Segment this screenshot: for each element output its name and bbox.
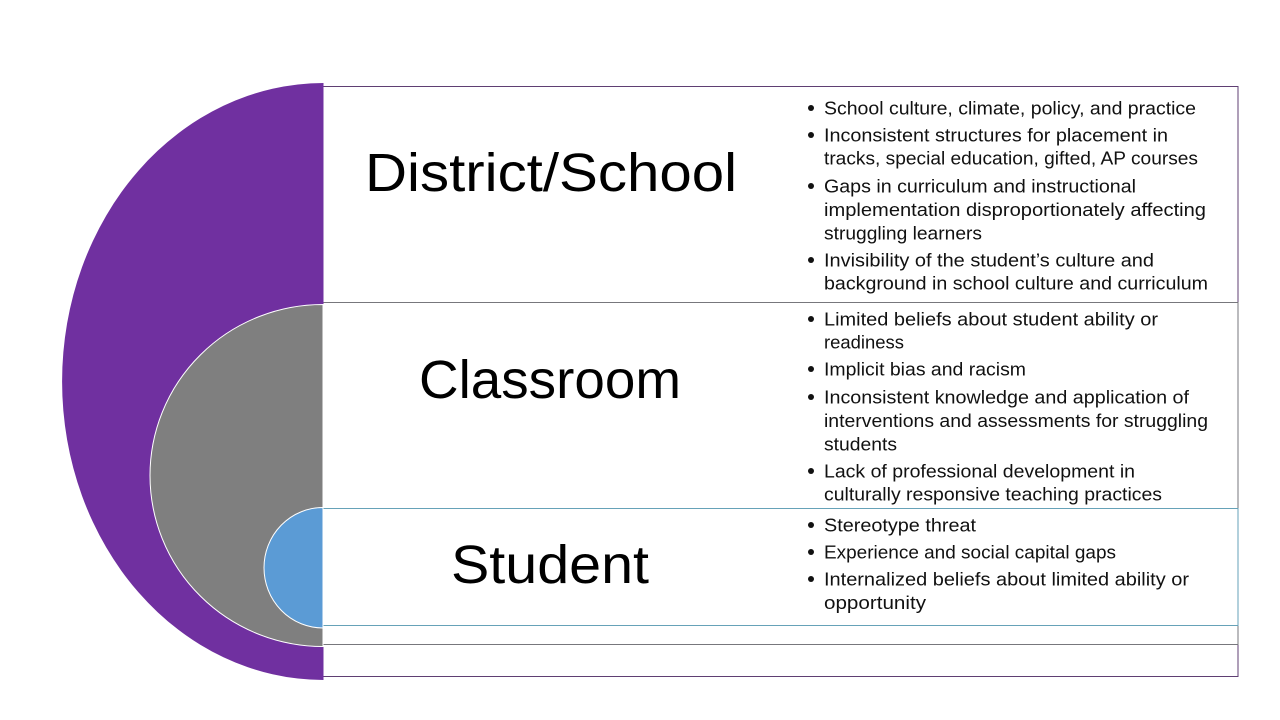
text block: classroom factors [808, 310, 1208, 504]
text block: classroom factors: readiness [824, 332, 904, 352]
text block: district/school factors: implementation disproportionately affecting [824, 200, 1206, 220]
text block: district/school factors: background in school culture and curriculum [824, 274, 1208, 294]
text block: classroom factors: Inconsistent knowledge and application of [824, 388, 1190, 408]
text block: student factors [808, 516, 1189, 613]
text block: district/school factors: Inconsistent structures for placement in [824, 126, 1168, 146]
panel: student box [323, 508, 1238, 626]
text block: classroom factors: interventions and assessments for struggling [824, 411, 1208, 431]
heading: Student: Student [451, 535, 649, 595]
text block: district/school factors: struggling learners [824, 224, 982, 244]
panel: classroom box [323, 302, 1238, 644]
text block: student factors: Stereotype threat [824, 516, 976, 536]
icon: blue half circle [264, 508, 323, 628]
text block: district/school factors: School culture, climate, policy, and practice [824, 98, 1196, 118]
text block: student factors: opportunity [824, 593, 926, 613]
text block: student factors: Experience and social capital gaps [824, 542, 1116, 562]
heading: District/School: District/School [365, 143, 737, 203]
text block: district/school factors: Gaps in curriculum and instructional [824, 176, 1136, 196]
icon: gray half circle [150, 304, 323, 646]
text block: classroom factors: Lack of professional development in [824, 462, 1135, 482]
text block: classroom factors: Limited beliefs about student ability or [824, 310, 1158, 330]
text block: district/school factors: Invisibility of the student’s culture and [824, 250, 1154, 270]
text block: district/school factors [808, 98, 1208, 294]
icon: purple half circle [62, 83, 324, 680]
text block: classroom factors: culturally responsive teaching practices [824, 484, 1162, 504]
text block: student factors: Internalized beliefs about limited ability or [824, 570, 1189, 590]
heading: Classroom: Classroom [419, 350, 681, 410]
text block: district/school factors: tracks, special education, gifted, AP courses [824, 148, 1198, 168]
text block: classroom factors: students [824, 434, 897, 454]
text block: classroom factors: Implicit bias and racism [824, 360, 1026, 380]
panel: outer district/school box [323, 86, 1238, 676]
